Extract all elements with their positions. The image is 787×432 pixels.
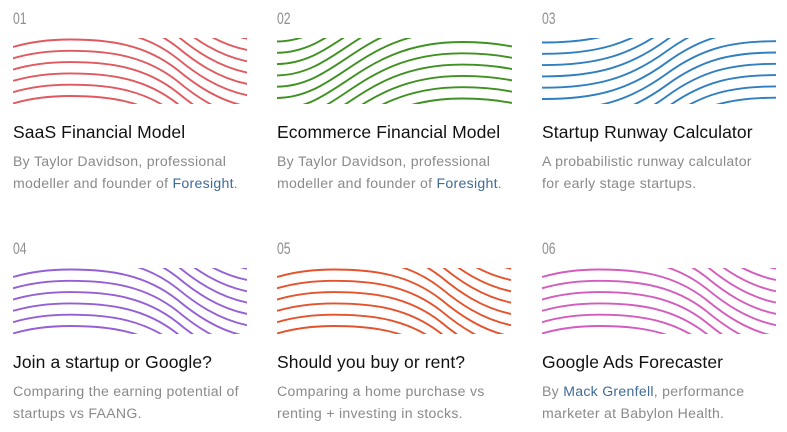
- title: Startup Runway Calculator: [542, 122, 753, 142]
- title: Google Ads Forecaster: [542, 352, 723, 372]
- card 01: SaaS Financial Model: [13, 8, 247, 191]
- description: By Taylor Davidson, professional: [277, 153, 490, 169]
- wave pattern: purple: [13, 268, 247, 334]
- number 02: 02: [277, 8, 291, 28]
- number 04: 04: [13, 238, 27, 258]
- description: modeller and founder of Foresight.: [13, 175, 238, 191]
- description: [542, 153, 752, 191]
- wave pattern: green: [277, 38, 512, 104]
- card 05: Should you buy or rent?: [277, 238, 512, 421]
- description: By Taylor Davidson, professional: [13, 153, 226, 169]
- title: SaaS Financial Model: [13, 122, 185, 142]
- description: [13, 153, 238, 191]
- description: By Mack Grenfell, performance: [542, 383, 744, 399]
- description: marketer at Babylon Health.: [542, 405, 724, 421]
- number 03: 03: [542, 8, 556, 28]
- card 04: Join a startup or Google?: [13, 238, 247, 421]
- description: for early stage startups.: [542, 175, 696, 191]
- wave pattern: orange: [277, 268, 512, 334]
- description: [13, 383, 239, 421]
- description: renting + investing in stocks.: [277, 405, 463, 421]
- number 01: 01: [13, 8, 27, 28]
- wave pattern: red: [13, 38, 247, 104]
- description: Comparing a home purchase vs: [277, 383, 485, 399]
- title: Should you buy or rent?: [277, 352, 465, 372]
- number 05: 05: [277, 238, 291, 258]
- description: [277, 153, 502, 191]
- description: modeller and founder of Foresight.: [277, 175, 502, 191]
- description: A probabilistic runway calculator: [542, 153, 752, 169]
- wave pattern: blue: [542, 38, 776, 104]
- card 06: Google Ads Forecaster: [542, 238, 776, 421]
- card 02: Ecommerce Financial Model: [277, 8, 512, 191]
- card 03: Startup Runway Calculator: [542, 8, 776, 191]
- title: Join a startup or Google?: [13, 352, 212, 372]
- description: [542, 383, 744, 421]
- number 06: 06: [542, 238, 556, 258]
- description: startups vs FAANG.: [13, 405, 142, 421]
- description: [277, 383, 485, 421]
- wave pattern: pink: [542, 268, 776, 334]
- description: Comparing the earning potential of: [13, 383, 239, 399]
- title: Ecommerce Financial Model: [277, 122, 500, 142]
